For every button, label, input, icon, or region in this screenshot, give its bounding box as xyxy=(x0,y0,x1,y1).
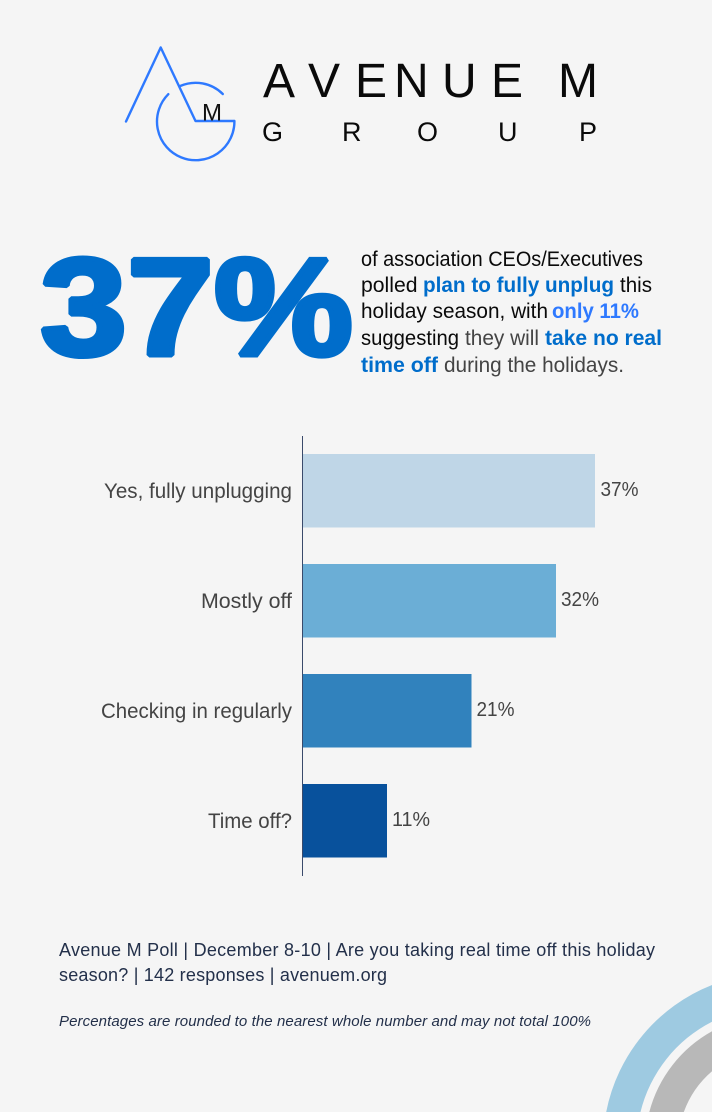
stat description text: time off xyxy=(361,354,439,377)
icon: logo mark xyxy=(126,48,234,160)
stat description text: this xyxy=(620,274,652,297)
stat description text: only 11% xyxy=(552,300,639,323)
poll source note: season? | 142 responses | avenuem.org xyxy=(59,965,387,985)
bar: Yes, fully unplugging 37% xyxy=(104,454,639,528)
stat description text xyxy=(361,248,662,377)
logo wordmark: Group: GROUP xyxy=(262,117,597,147)
stat description text: they will xyxy=(465,327,539,350)
poll source note: Avenue M Poll | December 8-10 | Are you taking real time off this holiday xyxy=(59,940,655,960)
stat description text: polled xyxy=(361,274,418,297)
bar: Checking in regularly 21%: 21% xyxy=(476,699,515,721)
icon: logo mark: M xyxy=(202,100,222,126)
stat description text: holiday season, with xyxy=(361,300,548,323)
bar: Checking in regularly 21%: Checking in regularly xyxy=(101,700,292,723)
big stat: 37%: 37% xyxy=(40,230,353,385)
stat description text: take no real xyxy=(545,327,662,350)
bar: Time off? 11%: 11% xyxy=(392,809,430,831)
bar: Time off? 11%: Time off? xyxy=(208,810,292,833)
logo wordmark: Avenue M: AVENUE M xyxy=(263,55,598,108)
bar: Time off? 11% xyxy=(208,784,430,858)
bar: Mostly off 32%: Mostly off xyxy=(201,590,292,613)
stat description text: of association CEOs/Executives xyxy=(361,248,643,271)
corner decoration: arcs xyxy=(606,985,712,1112)
bar: Yes, fully unplugging 37%: 37% xyxy=(600,479,639,501)
rounding disclaimer: Percentages are rounded to the nearest whole number and may not total 100% xyxy=(59,1013,591,1030)
poll source note xyxy=(59,940,655,985)
stat description text: during the holidays. xyxy=(444,354,624,377)
bar: Mostly off 32% xyxy=(201,564,599,638)
logo: Avenue M Group xyxy=(126,48,598,160)
bar: Checking in regularly 21% xyxy=(101,674,515,748)
bar: Mostly off 32%: 32% xyxy=(561,589,599,611)
bar: Yes, fully unplugging 37%: Yes, fully unplugging xyxy=(104,480,292,503)
bar chart: holiday time off responses xyxy=(101,436,639,876)
stat description text: suggesting xyxy=(361,327,459,350)
stat description text: plan to fully unplug xyxy=(423,274,614,297)
